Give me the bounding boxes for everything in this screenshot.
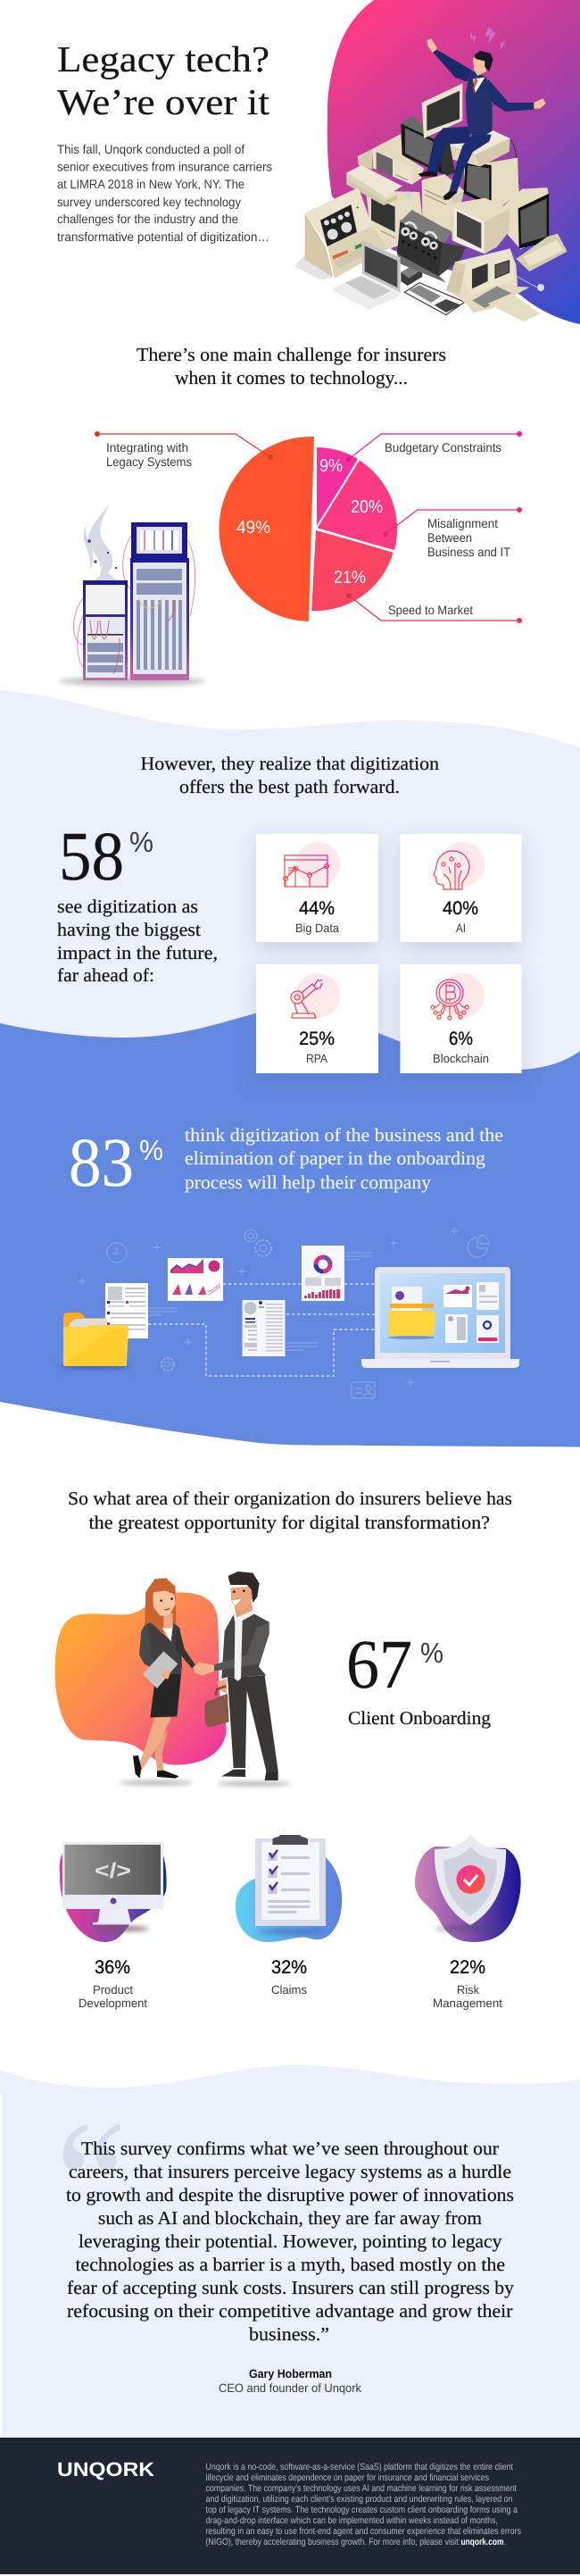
item: Risk Management: 22% xyxy=(450,1957,485,1978)
company description xyxy=(205,2462,521,2547)
stat: 67 percent: Client Onboarding xyxy=(348,1707,491,1729)
card: Big Data: Big Data xyxy=(295,921,339,935)
man xyxy=(194,1571,278,1780)
card: Blockchain: Blockchain xyxy=(433,1052,489,1065)
quote text: leveraging their potential. However, pointing to legacy xyxy=(79,2230,502,2252)
card: AI: 40% xyxy=(443,898,478,919)
quote text: refocusing on their competitive advantage and grow their xyxy=(67,2300,512,2322)
heading: main challenge: when it comes to technology... xyxy=(175,367,408,388)
intro paragraph: senior executives from insurance carriers xyxy=(57,159,272,173)
item: Product Development: Product xyxy=(93,1983,133,1997)
stat: 58 percent: far ahead of: xyxy=(57,964,154,986)
illustration: overheating servers xyxy=(59,500,205,686)
company description: unqork.com xyxy=(460,2537,503,2547)
item: Product Development: 36% xyxy=(95,1957,130,1978)
small box rear left xyxy=(358,149,372,170)
hero gradient blob xyxy=(327,0,580,324)
card: AI: AI xyxy=(456,921,466,935)
icon: shield xyxy=(415,1834,521,1942)
heading: opportunity: the greatest opportunity for digital transformation? xyxy=(89,1512,490,1533)
icon: clipboard xyxy=(236,1835,342,1942)
intro paragraph xyxy=(57,142,272,244)
right monitor xyxy=(504,188,568,271)
dashed connectors xyxy=(148,1284,375,1376)
quote text: technologies as a barrier is a myth, based mostly on the xyxy=(75,2254,505,2275)
pie chart: 20% xyxy=(351,497,383,517)
stat: 58 percent xyxy=(57,817,218,986)
icon: bitcoin circuit xyxy=(431,980,468,1020)
pale monitor xyxy=(422,83,462,138)
company description: and digitization, utilizing each client’s existing product and underwriting rules, layered on xyxy=(205,2494,513,2505)
item: Risk Management: Risk xyxy=(457,1983,479,1997)
pie labels: Between xyxy=(427,530,472,545)
laptop xyxy=(361,1267,519,1368)
lightning marks xyxy=(470,27,506,50)
background wave: light blue section xyxy=(0,690,580,1071)
pie chart: 49% xyxy=(236,518,270,538)
pie labels: Business and IT xyxy=(427,545,510,559)
illustration: handshake xyxy=(55,1571,292,1786)
background wave: quote section xyxy=(0,2065,580,2439)
item: Claims: 32% xyxy=(271,1957,307,1978)
card: RPA: 25% xyxy=(299,1029,335,1049)
laptop xyxy=(333,240,401,310)
item: Claims: Claims xyxy=(271,1983,307,1997)
quote text: fear of accepting sunk costs. Insurers can still progress by xyxy=(67,2277,515,2298)
centre tower xyxy=(422,174,464,233)
stat: 58 percent: having the biggest xyxy=(57,919,201,940)
card: Blockchain xyxy=(400,964,521,1073)
pie chart: 21% xyxy=(334,568,366,588)
stat: 83 percent: process will help their company xyxy=(185,1171,432,1193)
title: We’re over it xyxy=(57,81,270,122)
intro paragraph: challenges for the industry and the xyxy=(57,212,238,226)
company description: companies. The company’s technology uses AI and machine learning for risk assessment xyxy=(205,2483,517,2494)
woman xyxy=(133,1578,195,1779)
stat: 67 percent: % xyxy=(420,1637,443,1669)
quote text: This survey confirms what we’ve seen throughout our xyxy=(81,2138,499,2159)
stat: 83 percent: 83 xyxy=(69,1123,134,1201)
mid right monitor xyxy=(463,158,519,209)
folder with document xyxy=(60,1283,148,1369)
card: AI xyxy=(400,834,521,942)
flat keyboard xyxy=(404,283,465,315)
background wave: blue section xyxy=(0,1011,580,1446)
heading: digitization: offers the best path forward. xyxy=(179,776,400,797)
illustration: man on pile of legacy computers xyxy=(294,27,568,321)
bottom right computer xyxy=(446,248,544,321)
illustration: paper to digital workflow xyxy=(60,1228,519,1398)
stat: 58 percent: 58 xyxy=(59,817,124,895)
pie labels: Misalignment xyxy=(427,516,498,530)
profile document xyxy=(243,1300,286,1356)
heading: digitization xyxy=(141,753,440,797)
company description: Unqork is a no-code, software-as-a-service (SaaS) platform that digitizes the entire client xyxy=(205,2462,513,2472)
top left keyboard xyxy=(346,165,411,205)
item: Risk Management xyxy=(415,1834,521,2010)
icon: quotation mark: “ xyxy=(55,2085,127,2282)
stat: 67 percent xyxy=(346,1625,491,1729)
logo: UNQORK xyxy=(57,2458,154,2480)
dark reel machine xyxy=(397,210,466,286)
card: RPA xyxy=(256,964,378,1073)
stat: 58 percent: see digitization as xyxy=(57,896,198,917)
dark crt xyxy=(401,115,455,177)
faint background icons xyxy=(79,1228,489,1398)
pie labels: Budgetary Constraints xyxy=(385,440,501,454)
heading: main challenge xyxy=(137,344,446,388)
chart document xyxy=(168,1258,223,1301)
businessman xyxy=(418,38,546,200)
leader lines xyxy=(95,431,522,623)
heading: digitization: However, they realize that digitization xyxy=(141,753,440,774)
gradient blob xyxy=(55,1592,227,1765)
intro paragraph: survey underscored key technology xyxy=(57,195,241,209)
icon: robot arm xyxy=(291,980,322,1018)
stat: 58 percent: impact in the future, xyxy=(57,942,218,963)
heading: opportunity xyxy=(68,1488,512,1533)
item: Product Development: Development xyxy=(79,1997,147,2010)
pie labels xyxy=(106,440,510,617)
pie chart xyxy=(219,437,397,621)
icon: browser chart xyxy=(284,855,328,887)
stat: 58 percent: % xyxy=(129,826,153,858)
item: Claims xyxy=(236,1835,342,1997)
intro paragraph: This fall, Unqork conducted a poll of xyxy=(57,142,244,156)
card: Big Data xyxy=(256,834,378,942)
intro paragraph: at LIMRA 2018 in New York, NY. The xyxy=(57,177,244,191)
icon: AI head xyxy=(434,851,469,890)
stat: 83 percent xyxy=(69,1123,503,1201)
stat: 67 percent: 67 xyxy=(346,1625,412,1703)
pie labels: Legacy Systems xyxy=(106,454,192,469)
quote attribution: Gary Hoberman xyxy=(249,2367,332,2380)
quote attribution xyxy=(219,2367,361,2395)
quote text: business.” xyxy=(249,2323,329,2345)
card: RPA: RPA xyxy=(306,1052,327,1065)
company description: top of legacy IT systems. The technology creates custom client onboarding forms using a xyxy=(205,2505,518,2515)
company description: resulting in an easy to use front-end agent and consumer experience that eliminates errors xyxy=(205,2526,521,2537)
title: Legacy tech? xyxy=(57,38,269,79)
stat: 83 percent: think digitization of the business and the xyxy=(185,1124,503,1146)
icon: monitor xyxy=(60,1842,167,1942)
low left monitor xyxy=(366,190,422,251)
heading: opportunity: So what area of their organization do insurers believe has xyxy=(68,1488,512,1509)
footer band xyxy=(0,2438,580,2574)
quote text: such as AI and blockchain, they are far away from xyxy=(98,2207,482,2229)
left computer xyxy=(372,134,424,185)
heading: main challenge: There’s one main challenge for insurers xyxy=(137,344,446,365)
stat: 83 percent: elimination of paper in the onboarding xyxy=(185,1147,486,1169)
quote text: to growth and despite the disruptive power of innovations xyxy=(66,2184,514,2205)
quote text xyxy=(66,2138,515,2345)
card: Big Data: 44% xyxy=(299,898,335,919)
company description: (NIGO), thereby accelerating business growth. For more info, please visit: xyxy=(205,2537,460,2547)
donut document xyxy=(302,1246,344,1301)
stat: 83 percent: % xyxy=(139,1134,163,1166)
quote attribution: CEO and founder of Unqork xyxy=(219,2381,361,2395)
top box xyxy=(446,129,510,167)
item: Product Development xyxy=(60,1842,167,2010)
low right monitor xyxy=(452,198,510,254)
company description: . xyxy=(503,2537,506,2547)
console xyxy=(305,188,387,279)
pie labels: Integrating with xyxy=(106,440,188,454)
pie labels: Speed to Market xyxy=(388,603,473,617)
company description: lifecycle and eliminates dependence on paper for insurance and financial services xyxy=(205,2472,489,2483)
quote text: careers, that insurers perceive legacy systems as a hurdle xyxy=(69,2161,511,2182)
title xyxy=(57,38,270,122)
company description: drag-and-drop interface which can be implemented within weeks instead of months, xyxy=(205,2515,498,2526)
item: Risk Management: Management xyxy=(433,1997,502,2010)
card: Blockchain: 6% xyxy=(449,1029,473,1049)
intro paragraph: transformative potential of digitization… xyxy=(57,229,269,244)
icon: monitor: </> xyxy=(95,1859,131,1883)
pie chart: 9% xyxy=(319,456,343,476)
